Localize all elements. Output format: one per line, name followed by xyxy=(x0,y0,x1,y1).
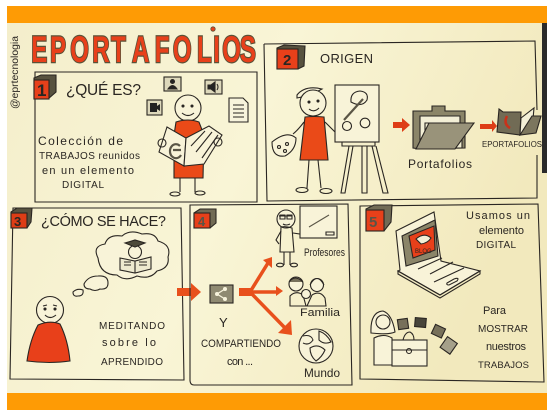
badge 5: 5 xyxy=(369,214,377,231)
text: para mostrar: MOSTRAR xyxy=(478,324,528,335)
text: meditando: MEDITANDO xyxy=(99,321,165,332)
badge 1 xyxy=(34,75,56,100)
text: usamos: DIGITAL xyxy=(476,240,516,251)
painter xyxy=(272,88,345,194)
text: para mostrar: TRABAJOS xyxy=(478,360,529,371)
panel 4: compartir xyxy=(190,204,352,385)
icon: share xyxy=(210,285,233,303)
text: para mostrar: Para xyxy=(483,305,507,317)
thought cloud xyxy=(73,232,169,296)
text: definition: DIGITAL xyxy=(62,180,104,191)
badge 2: 2 xyxy=(283,52,291,69)
arrow: to panel 4 xyxy=(177,283,201,301)
easel xyxy=(335,85,388,193)
label: mundo: Mundo xyxy=(304,366,340,380)
arrow: to eportafolios xyxy=(480,120,497,132)
text: compartiendo: con ... xyxy=(227,356,253,368)
text: usamos: elemento xyxy=(479,225,524,237)
text: meditando: sobre lo xyxy=(102,337,156,349)
title: EPORTAFOLIOS xyxy=(31,29,256,70)
icon: eportfolio book xyxy=(497,108,541,135)
badge 3: 3 xyxy=(14,214,21,229)
panel 2: origen xyxy=(264,41,542,201)
handle text: @eprtecnologia xyxy=(9,36,21,109)
text: compartiendo xyxy=(201,315,281,368)
right dark paper edge xyxy=(542,23,547,173)
heading: ¿QUÉ ES? xyxy=(66,82,141,99)
panel 1: qué es xyxy=(34,72,257,202)
board xyxy=(300,206,337,238)
heading: ¿CÓMO SE HACE? xyxy=(41,213,166,230)
arrow: to portafolios xyxy=(393,118,410,132)
text: compartiendo: Y xyxy=(219,315,228,330)
text: definition xyxy=(38,134,140,191)
badge 2 xyxy=(277,45,305,69)
globe icon xyxy=(299,329,333,363)
badge 4 xyxy=(194,209,216,229)
icon: sound xyxy=(205,80,222,94)
panel 3: cómo se hace xyxy=(10,208,184,380)
label: eportafolios: EPORTAFOLIOS xyxy=(482,139,542,149)
student with case xyxy=(371,311,427,366)
badge 3 xyxy=(11,208,32,229)
thinking person xyxy=(27,296,70,362)
laptop xyxy=(396,212,480,298)
text: definition: TRABAJOS reunidos xyxy=(39,151,140,162)
person with book xyxy=(158,95,222,196)
text: meditando: APRENDIDO xyxy=(101,357,163,368)
text: definition: Colección de xyxy=(38,134,123,148)
panel 5: usamos xyxy=(360,204,544,382)
label: portafolios: Portafolios xyxy=(408,157,472,171)
label: profesores: Profesores xyxy=(304,247,345,259)
text: usamos: Usamos un xyxy=(466,210,530,222)
text: meditando xyxy=(99,321,165,368)
reading graduate xyxy=(120,240,151,273)
icon: photo xyxy=(164,77,181,91)
arrows: sharing xyxy=(239,257,292,335)
family icon xyxy=(289,277,326,306)
teacher xyxy=(276,210,313,267)
laptop: BLOG xyxy=(415,249,432,255)
text: definition: en un elemento xyxy=(42,165,134,177)
text: para mostrar: nuestros xyxy=(486,341,526,353)
badge 4: 4 xyxy=(198,214,206,229)
text: compartiendo: COMPARTIENDO xyxy=(201,338,281,350)
text: usamos xyxy=(466,210,530,251)
icon: document xyxy=(229,98,248,122)
bottom orange band xyxy=(7,393,547,410)
top orange band xyxy=(7,6,547,23)
floating work icons xyxy=(397,318,457,354)
icon: video xyxy=(147,100,162,115)
text: para mostrar xyxy=(478,305,529,371)
label: familia: Familia xyxy=(300,307,341,319)
icon: folder xyxy=(413,106,474,149)
badge 1: 1 xyxy=(37,81,46,100)
badge 5 xyxy=(366,205,392,231)
heading: ORIGEN xyxy=(320,51,373,66)
